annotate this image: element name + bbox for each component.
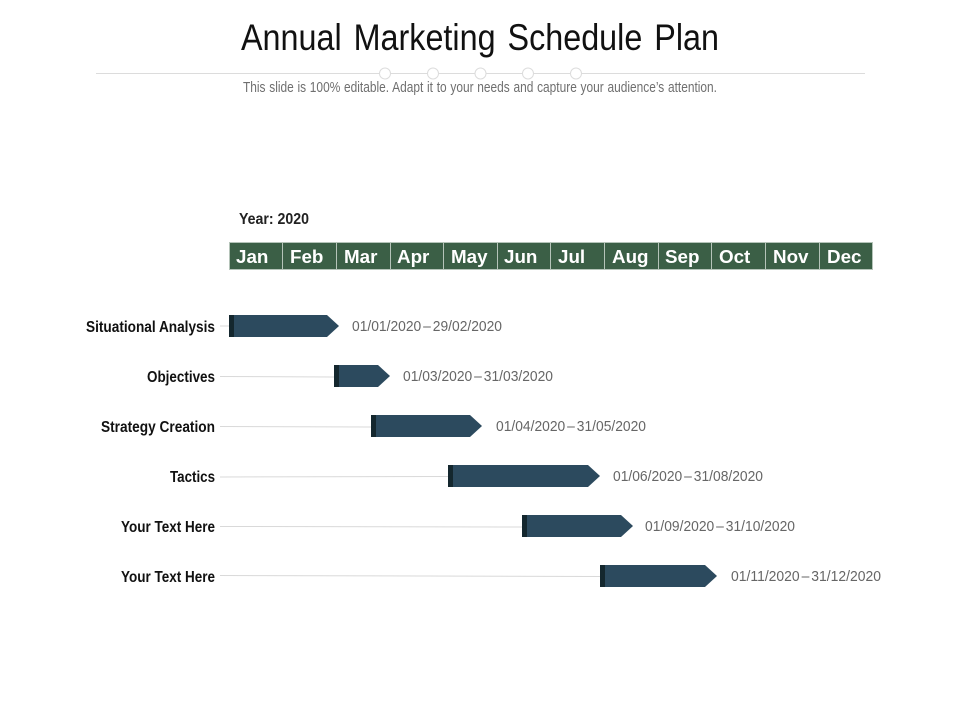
row: Tactics: 01/06/2020 – 31/08/2020: [613, 469, 763, 485]
row: Objectives: 01/03/2020 – 31/03/2020: [403, 369, 553, 385]
month header: Aug: [612, 246, 649, 267]
row: Strategy Creation: Strategy Creation: [101, 419, 215, 436]
row: Strategy Creation: [101, 415, 646, 437]
month header: [229, 242, 873, 270]
year label: Year: 2020: [239, 211, 309, 228]
month header: Oct: [719, 246, 751, 267]
month header: Sep: [665, 246, 699, 267]
title divider with dots: [96, 68, 865, 79]
row: Tactics: [170, 465, 763, 487]
row: Situational Analysis: [86, 315, 502, 337]
month header: Nov: [773, 246, 809, 267]
month header: Dec: [827, 246, 861, 267]
row: Your Text Here (Sep-Oct): [121, 515, 795, 537]
row: Your Text Here (Nov-Dec): 01/11/2020 – 31/12/2020: [731, 569, 881, 585]
month header: Apr: [397, 246, 430, 267]
title: Annual Marketing Schedule Plan: [241, 16, 719, 58]
row: Situational Analysis: 01/01/2020 – 29/02/2020: [352, 319, 502, 335]
row: Tactics: Tactics: [170, 469, 215, 486]
row: Objectives: [147, 365, 553, 387]
subtitle: This slide is 100% editable. Adapt it to your needs and capture your audience’s attention.: [243, 80, 717, 96]
row: Your Text Here (Sep-Oct): 01/09/2020 – 31/10/2020: [645, 519, 795, 535]
row: Situational Analysis: Situational Analysis: [86, 319, 215, 336]
month header: Feb: [290, 246, 323, 267]
month header: Jun: [504, 246, 537, 267]
row: Objectives: Objectives: [147, 369, 215, 386]
month header: May: [451, 246, 488, 267]
row: Your Text Here (Nov-Dec): [121, 565, 881, 587]
month header: Mar: [344, 246, 378, 267]
row: Strategy Creation: 01/04/2020 – 31/05/2020: [496, 419, 646, 435]
row: Your Text Here (Nov-Dec): Your Text Here: [121, 569, 215, 586]
month header: Jul: [558, 246, 585, 267]
row: Your Text Here (Sep-Oct): Your Text Here: [121, 519, 215, 536]
month header: Jan: [236, 246, 268, 267]
